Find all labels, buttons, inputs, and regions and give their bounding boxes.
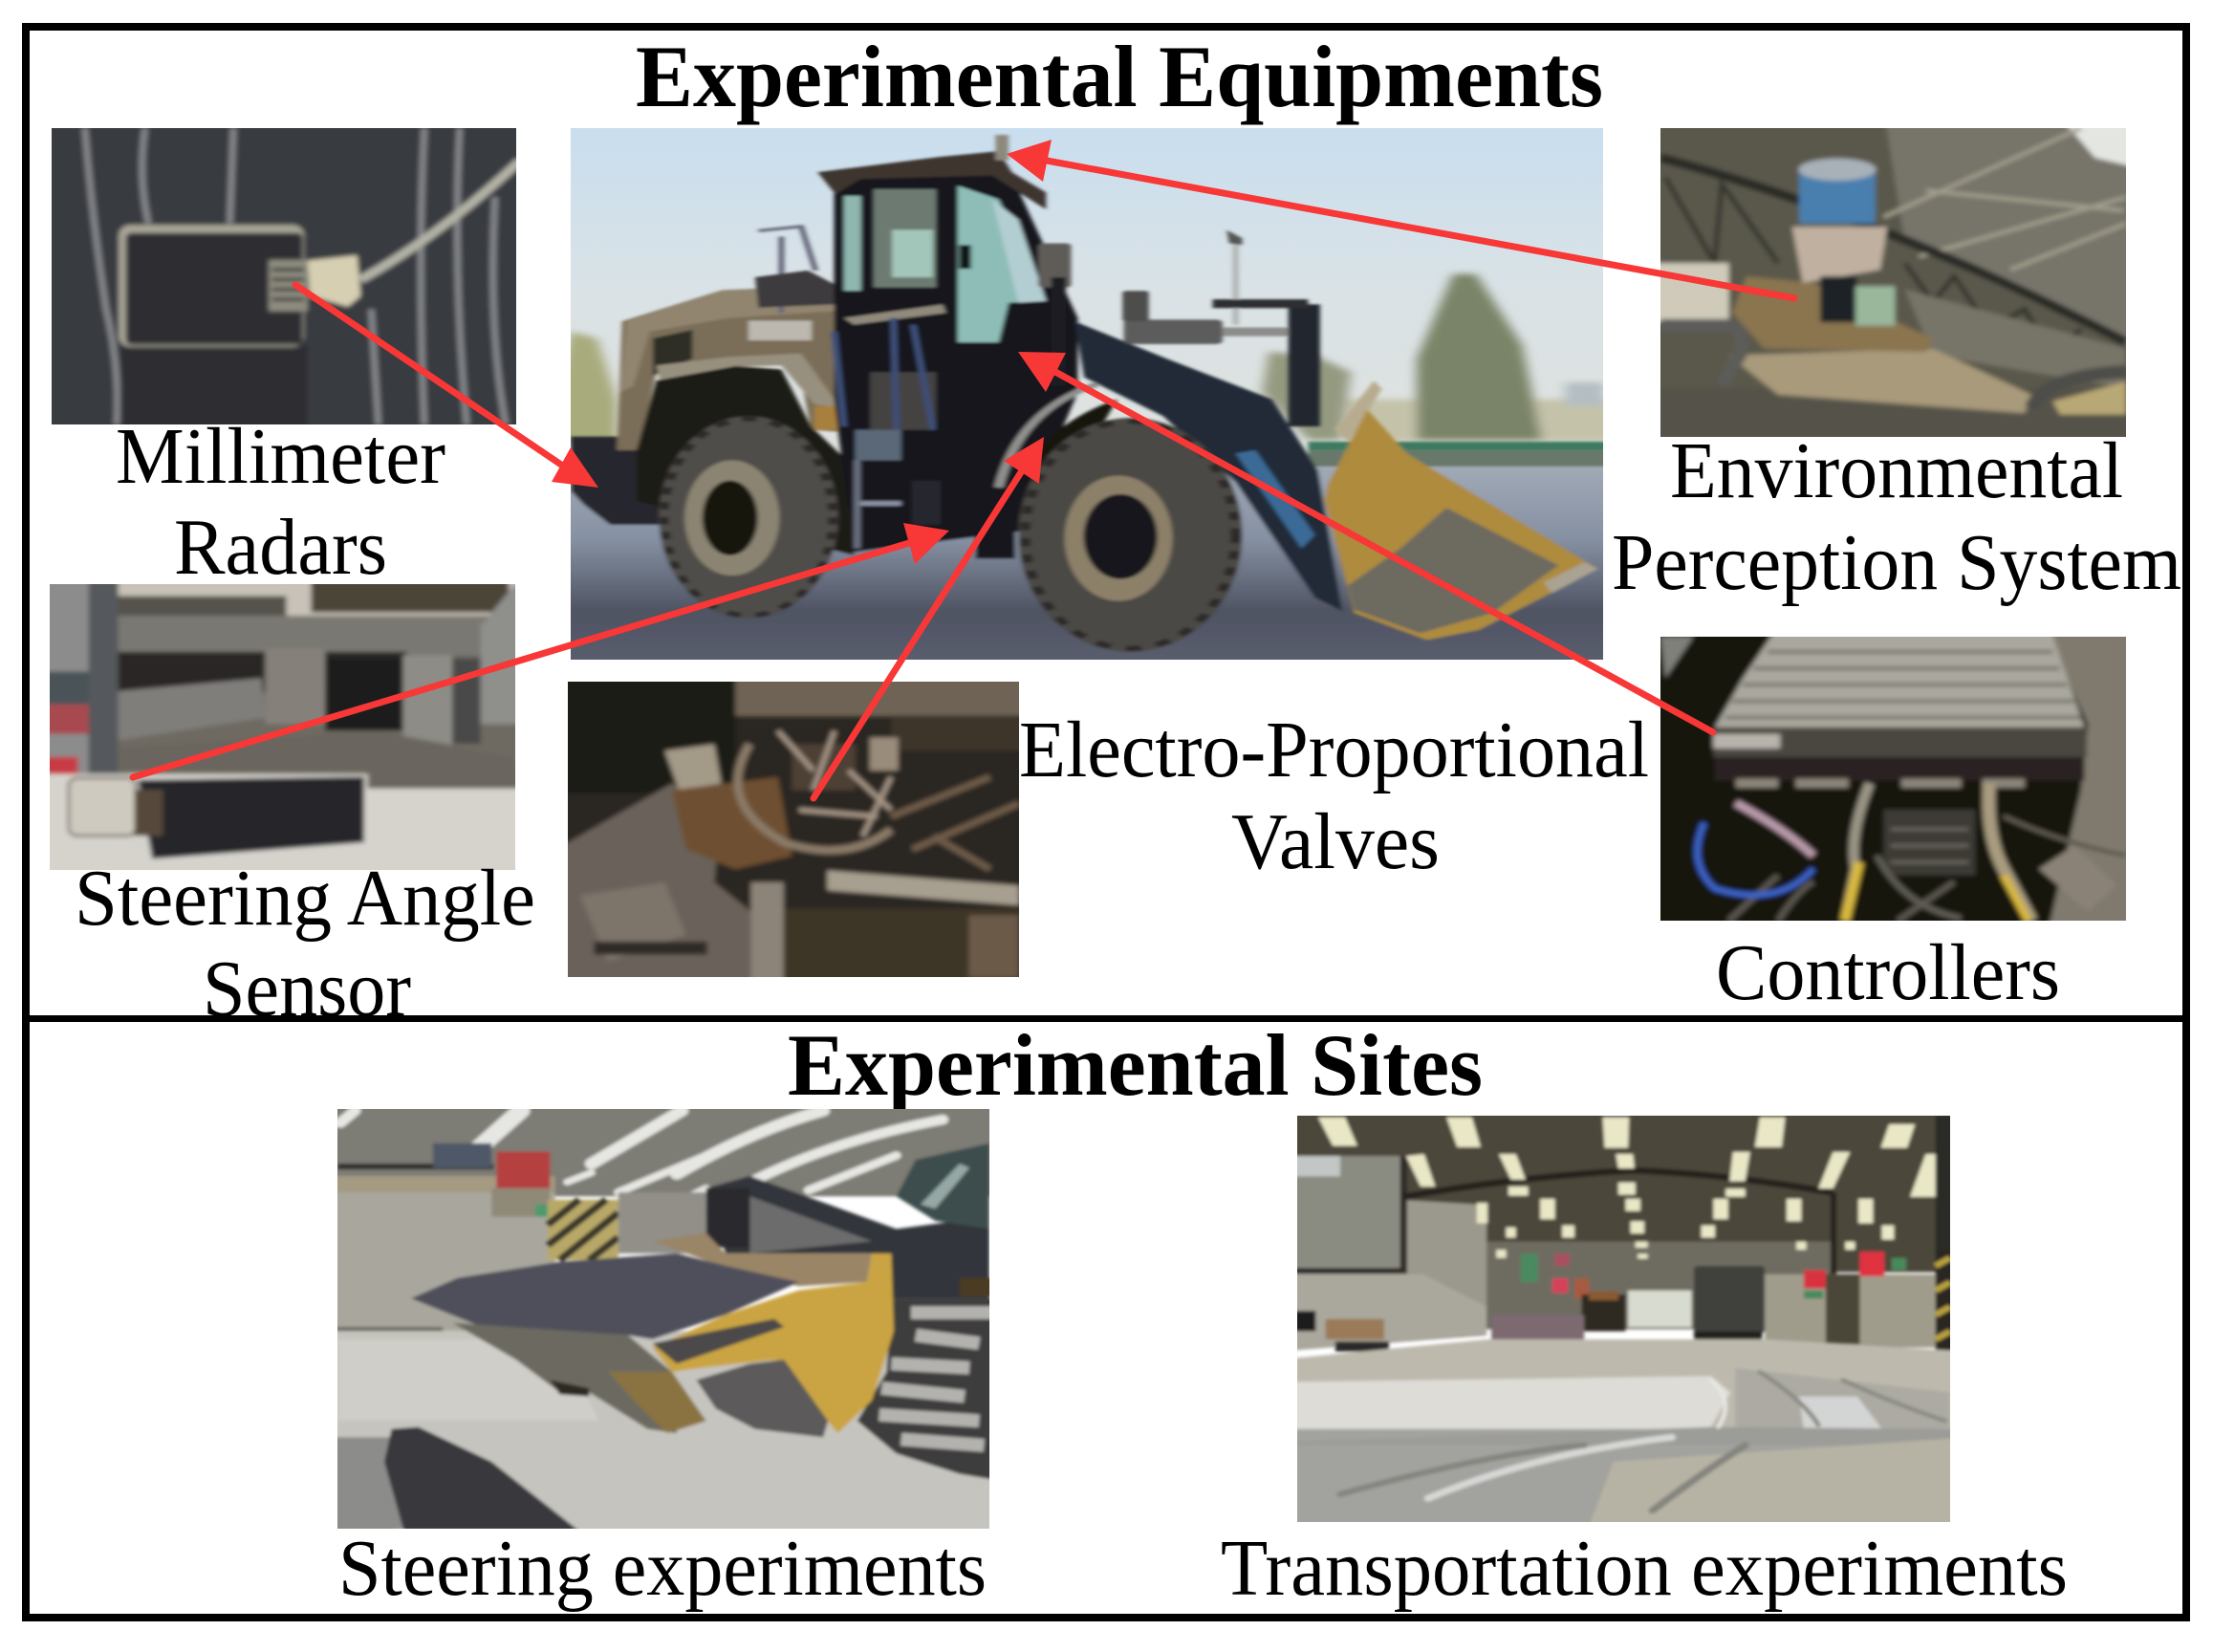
photo: steering experiments — [337, 1109, 989, 1529]
arrow: controllers to cab — [1018, 352, 1713, 732]
label: Steering experiments: Steering experiments — [338, 1524, 987, 1613]
panel divider — [26, 1015, 2186, 1022]
arrow: environmental perception system to roof — [1007, 140, 1794, 298]
label: Environmental Perception System — [1612, 426, 2181, 607]
floor — [316, 1331, 1009, 1543]
title: Experimental Sites: Experimental Sites — [788, 1016, 1483, 1114]
bucket — [653, 1233, 872, 1286]
label: Electro-Proportional Valves — [1019, 706, 1649, 886]
label: Steering Angle Sensor — [75, 854, 535, 1033]
background vegetation — [544, 273, 1624, 442]
label: Environmental Perception System: Environmental — [1670, 426, 2123, 515]
arrow: radar to rear of loader — [295, 285, 598, 488]
label: Environmental Perception System: Perception System — [1612, 518, 2181, 607]
arrow: steering angle sensor to articulation — [133, 523, 949, 777]
rear counterweight — [571, 437, 660, 525]
bucket — [1334, 380, 1382, 442]
label: Electro-Proportional Valves: Electro-Proportional — [1019, 706, 1649, 794]
hanging signs — [1521, 1254, 1538, 1282]
floor — [1277, 1339, 1969, 1539]
photo: wheel loader — [571, 128, 1603, 660]
label: Millimeter Radars: Millimeter — [116, 412, 445, 501]
vehicles — [1694, 1266, 1765, 1334]
label: Transportation experiments: Transportation experiments — [1221, 1524, 2068, 1613]
arrow: valves to hydraulic system — [814, 437, 1044, 798]
label: Millimeter Radars: Radars — [174, 503, 387, 592]
lift arm — [1074, 321, 1342, 611]
photo: steering angle sensor — [50, 584, 515, 870]
rear arch — [637, 366, 854, 555]
cab and chassis — [835, 162, 1077, 552]
photo: environmental perception system — [1660, 128, 2126, 437]
photo: electro-proportional valves — [568, 682, 1019, 977]
title: Experimental Equipments: Experimental Equipments — [636, 28, 1603, 125]
label: Millimeter Radars — [116, 412, 445, 592]
ladder on hood — [758, 227, 815, 313]
front tyre — [999, 384, 1097, 488]
photo: controllers — [1660, 637, 2126, 921]
label: Steering Angle Sensor: Steering Angle — [75, 854, 535, 943]
ceiling lights — [1318, 1118, 1936, 1259]
hood — [617, 286, 860, 450]
label: Electro-Proportional Valves: Valves — [1231, 797, 1440, 886]
photo: transportation experiments — [1297, 1116, 1950, 1522]
photo: millimeter radar — [52, 128, 516, 424]
rear tyre — [659, 416, 838, 619]
label: Steering Angle Sensor: Sensor — [203, 945, 411, 1033]
label: Controllers: Controllers — [1716, 928, 2060, 1017]
cab and machine — [706, 1176, 989, 1298]
tyre — [857, 1298, 1009, 1482]
